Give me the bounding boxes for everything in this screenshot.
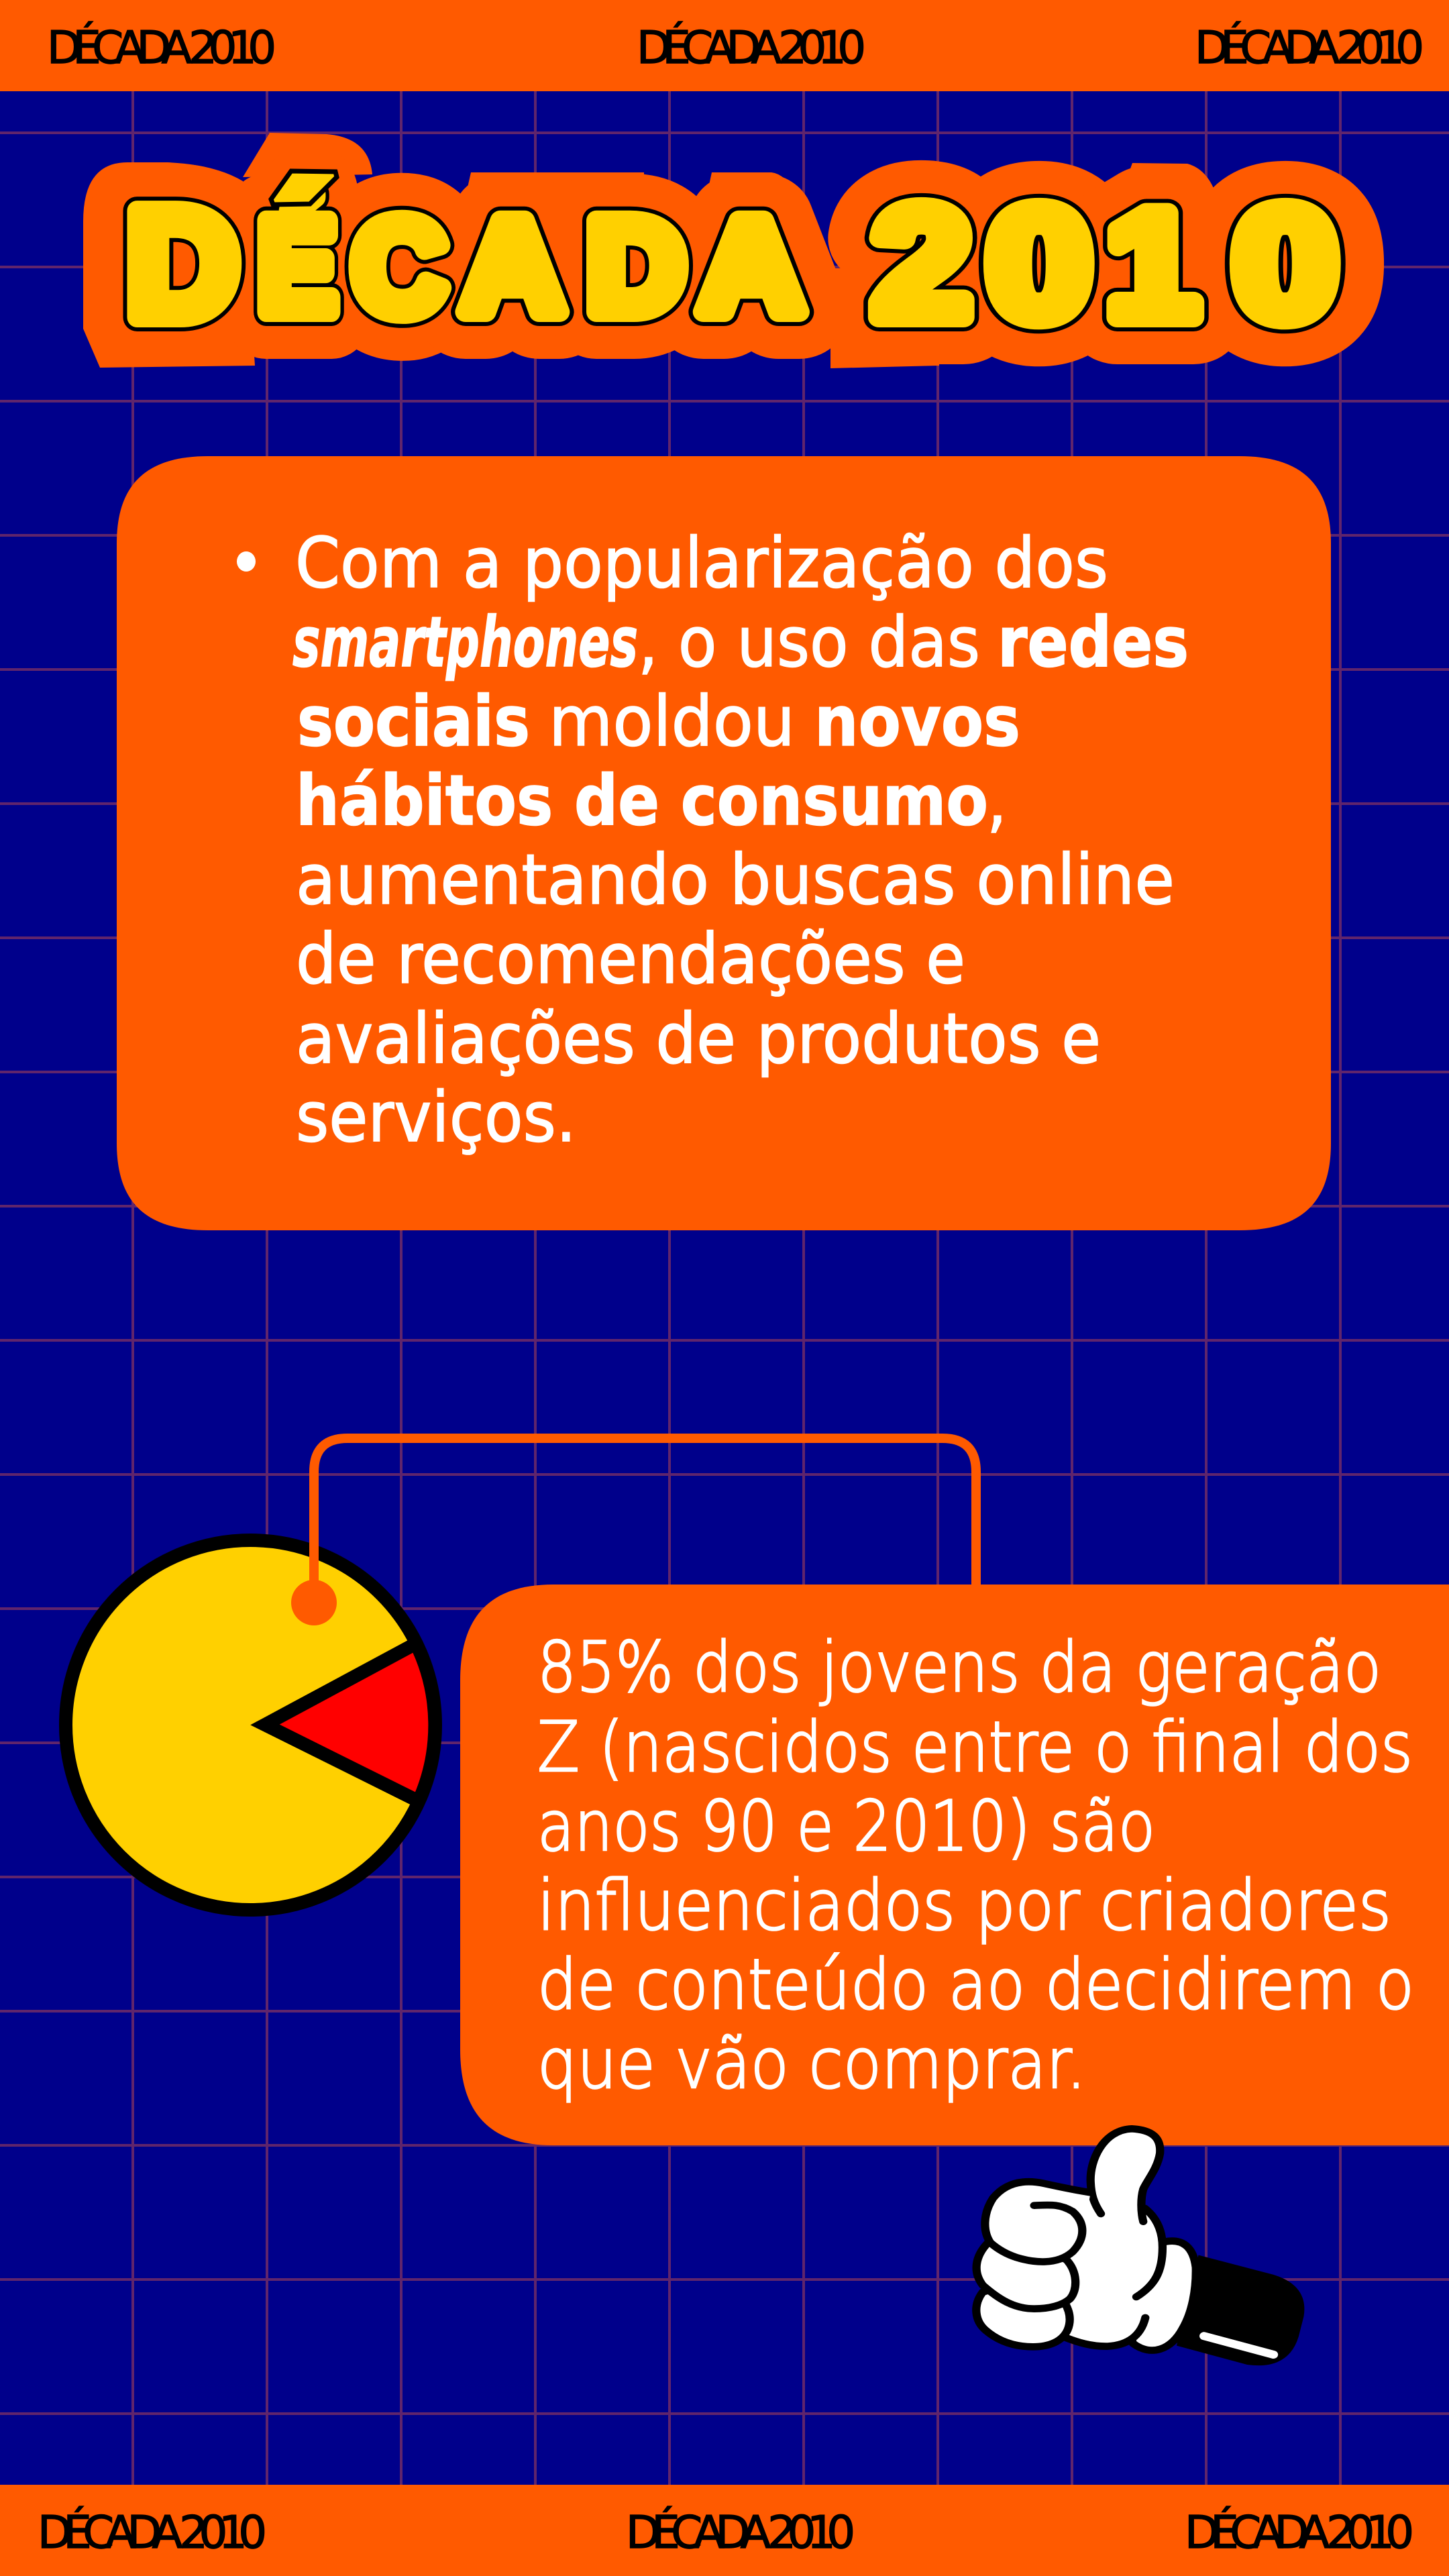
connector dot — [291, 1580, 337, 1625]
text block: panel one body — [292, 523, 1189, 1158]
title: DÉCADA 2010: 2 — [873, 174, 971, 351]
title: DÉCADA 2010: D — [588, 193, 684, 341]
title: DÉCADA 2010: A — [700, 192, 802, 340]
top band — [0, 0, 1449, 91]
title: DÉCADA 2010: C — [353, 193, 445, 341]
text block: panel one body: novos — [814, 682, 1020, 762]
text block: panel one body: , — [987, 761, 1007, 841]
title: DÉCADA 2010: A — [462, 193, 563, 341]
bottom band: DÉCADA 2010 — [38, 2506, 267, 2559]
accent mark of the letter E — [271, 171, 337, 205]
title: DÉCADA 2010: A — [462, 193, 563, 341]
top band: DÉCADA 2010 — [637, 21, 866, 74]
text block: panel one body: aumentando buscas online — [296, 840, 1175, 920]
title: DÉCADA 2010: D — [127, 176, 238, 350]
title: DÉCADA 2010: D — [127, 176, 238, 350]
connector line over pie — [309, 1543, 319, 1603]
title: DÉCADA 2010: É — [258, 192, 336, 340]
title: DÉCADA 2010: D — [588, 193, 684, 341]
panel: smartphones and social networks — [117, 456, 1331, 1230]
connector line — [314, 1438, 976, 1603]
text block: panel one body: serviços. — [296, 1077, 576, 1158]
title: DÉCADA 2010: A — [700, 192, 802, 340]
text block: panel one body: Com a popularização dos — [295, 523, 1108, 604]
title: DÉCADA 2010: 0 — [988, 176, 1090, 352]
text block: panel one body: de recomendações e — [296, 919, 965, 1000]
icon: bullet — [237, 551, 256, 572]
text block: panel one body: moldou — [549, 682, 795, 762]
text block: panel one body: smartphones — [292, 602, 638, 683]
text block: panel two body: que vão comprar. — [537, 2024, 1086, 2104]
text block: panel one body: , o uso das — [638, 602, 980, 683]
title: DÉCADA 2010: A — [700, 192, 802, 340]
title: DÉCADA 2010: 0 — [1234, 176, 1336, 352]
text block: panel one body: hábitos de consumo — [296, 761, 988, 841]
text block: panel one body: redes — [998, 602, 1189, 683]
title: DÉCADA 2010 — [83, 133, 1336, 368]
text block: panel two body — [537, 1627, 1414, 2104]
bottom band: DÉCADA 2010 — [626, 2506, 855, 2559]
top band: DÉCADA 2010 — [47, 21, 276, 74]
title: DÉCADA 2010: 0 — [988, 176, 1090, 352]
title: DÉCADA 2010: D — [127, 176, 238, 350]
title: DÉCADA 2010: 2 — [873, 174, 971, 351]
text block: panel two body: anos 90 e 2010) são — [537, 1786, 1155, 1867]
top band: DÉCADA 2010 — [1195, 21, 1424, 74]
title: DÉCADA 2010: É — [258, 192, 336, 340]
title: DÉCADA 2010: 0 — [1234, 176, 1336, 352]
title: DÉCADA 2010: 0 — [988, 176, 1090, 352]
bottom band: DÉCADA 2010 — [1185, 2506, 1414, 2559]
title: DÉCADA 2010: D — [588, 193, 684, 341]
title: DÉCADA 2010: 1 — [1107, 180, 1198, 350]
title: DÉCADA 2010: É — [258, 192, 336, 340]
text block: panel two body: influenciados por criadores — [537, 1866, 1391, 1946]
title: DÉCADA 2010: 1 — [1107, 180, 1198, 350]
title: DÉCADA 2010: C — [353, 193, 445, 341]
title: DÉCADA 2010: 0 — [1234, 176, 1336, 352]
chart: pac-man pie — [66, 1540, 435, 1910]
panel: generation Z statistic — [460, 1585, 1449, 2145]
title: DÉCADA 2010: 2 — [873, 174, 971, 351]
text block: panel one body: avaliações de produtos e — [296, 999, 1101, 1079]
icon: thumbs up — [976, 2129, 1304, 2365]
bottom band — [0, 2485, 1449, 2576]
title: DÉCADA 2010: A — [462, 193, 563, 341]
text block: panel one body: sociais — [297, 682, 530, 762]
title: DÉCADA 2010: 1 — [1107, 180, 1198, 350]
title: DÉCADA 2010: C — [353, 193, 445, 341]
